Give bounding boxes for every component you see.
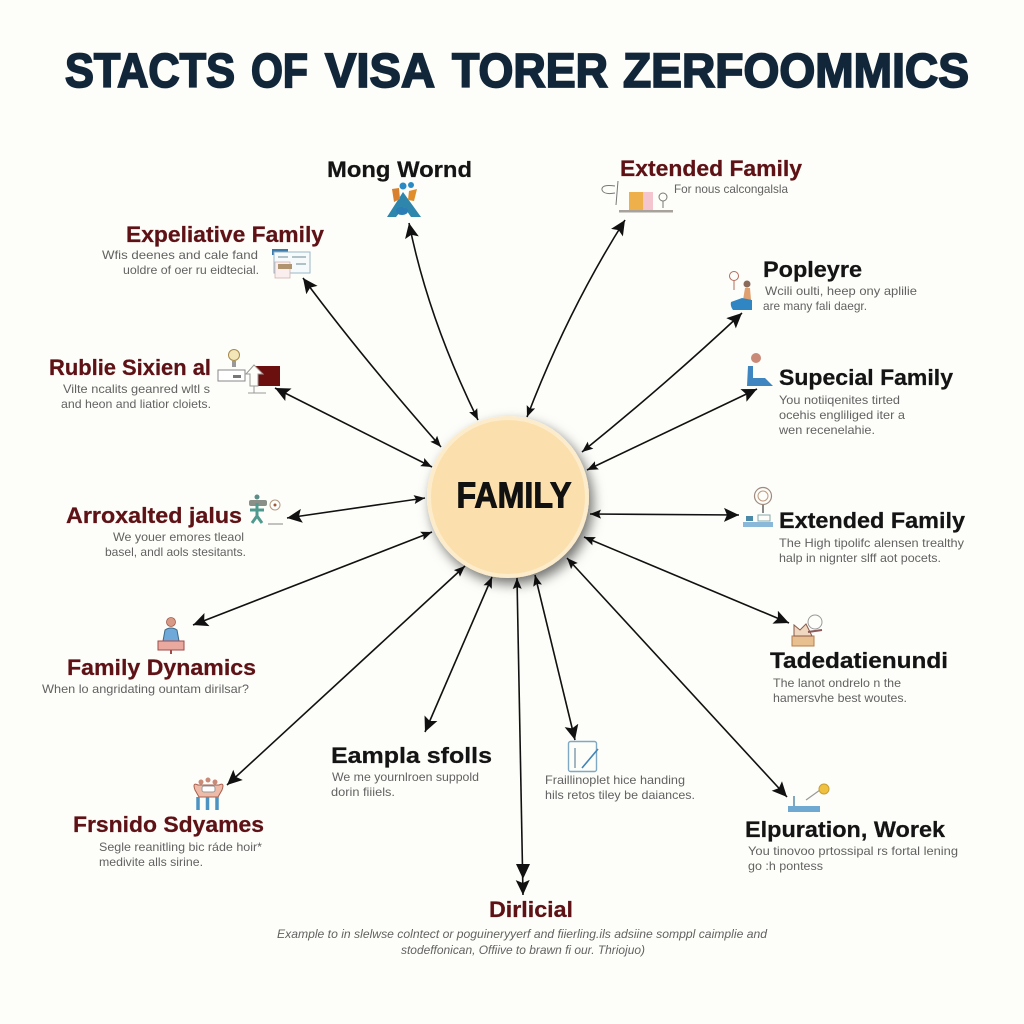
arrow: to Popleyre (582, 313, 742, 452)
description: The lanot ondrelo n the (773, 676, 901, 690)
description (102, 248, 259, 277)
title: ZERFOOMMICS (623, 45, 969, 98)
description: We youer emores tleaol (113, 530, 244, 544)
panel: Frsnido Sdyames (73, 778, 264, 869)
center circle: FAMILY (429, 418, 587, 576)
panel: Supecial Family (747, 353, 953, 437)
heading: Extended Family (620, 156, 802, 181)
panel: Arroxalted jalus (66, 494, 283, 559)
description (763, 284, 917, 313)
arrow: to Expeliative Family (303, 278, 441, 447)
title: TORER (452, 45, 608, 98)
description: basel, andl aols stesitants. (105, 545, 246, 559)
arrow: to Frsnido Sdyames (227, 566, 465, 785)
arrow: to Elpuration, Worek (567, 558, 787, 797)
arrow: to Eampla sfolls (425, 577, 492, 732)
panel: Dirlicial (277, 897, 767, 957)
panel: Extended Family top (602, 156, 802, 212)
heading: Rublie Sixien al (49, 355, 211, 380)
description (331, 770, 479, 799)
description: Wcili oulti, heep ony aplilie (765, 284, 917, 298)
panel: Expeliative Family (102, 222, 324, 278)
description: Wfis deenes and cale fand (102, 248, 258, 262)
description: You notiiqenites tirted (779, 393, 900, 407)
heading: Frsnido Sdyames (73, 812, 264, 837)
icon: monitor and lamp (218, 350, 280, 393)
heading: Arroxalted jalus (66, 503, 242, 528)
icon: lever with coin (788, 784, 829, 812)
panel: Popleyre (730, 257, 917, 313)
panel: Extended Family right (743, 488, 965, 565)
arrow: to Dirlicial (516, 578, 530, 895)
heading: Mong Wornd (327, 157, 472, 182)
heading: Dirlicial (489, 897, 573, 922)
description: uoldre of oer ru eidtecial. (123, 263, 259, 277)
description: When lo angridating ountam dirilsar? (42, 682, 249, 696)
arrow: to chart box (535, 575, 575, 740)
icon: group of people (194, 778, 223, 810)
icon: toolbox (792, 615, 822, 646)
arrows: spokes from center (193, 220, 789, 895)
arrow: to Extended Family top (527, 220, 625, 417)
description: ocehis engliliged iter a (779, 408, 905, 422)
description: wen recenelahie. (778, 423, 875, 437)
icon: framed chart (568, 742, 598, 772)
arrow: to Rublie Sixien al (275, 388, 432, 467)
panel: Eampla sfolls (331, 743, 492, 799)
description (99, 840, 262, 869)
icon: people (387, 182, 421, 217)
description (277, 927, 767, 957)
panel: chart box note (545, 742, 695, 802)
description (779, 536, 964, 565)
icon: home scene (602, 181, 673, 212)
icon: seated person (158, 618, 184, 654)
panel: Tadedatienundi (770, 615, 948, 705)
description (748, 844, 958, 873)
description: Segle reanitling bic ráde hoir* (99, 840, 262, 854)
heading: Expeliative Family (126, 222, 324, 247)
heading: Tadedatienundi (770, 648, 948, 673)
heading: Extended Family (779, 508, 965, 533)
heading: Family Dynamics (67, 655, 256, 680)
arrow: to Mong Wornd (409, 223, 478, 420)
description: Fraillinoplet hice handing (545, 773, 685, 787)
icon: figure and dial (249, 494, 283, 524)
description: hils retos tiley be daiances. (545, 788, 695, 802)
description: medivite alls sirine. (99, 855, 203, 869)
description: You tinovoo prtossipal rs fortal lening (748, 844, 958, 858)
arrow: to Family Dynamics (193, 532, 432, 625)
heading: Elpuration, Worek (745, 817, 946, 842)
description: The High tipolifc alensen trealthy (779, 536, 964, 550)
description (778, 393, 905, 437)
icon: documents (272, 249, 310, 278)
title (65, 45, 969, 98)
panel: Rublie Sixien al (49, 350, 280, 411)
heading: Supecial Family (779, 365, 953, 390)
description (545, 773, 695, 802)
icon: chair with person (747, 353, 773, 386)
heading: Popleyre (763, 257, 862, 282)
icon: person with sign (730, 272, 752, 310)
description (105, 530, 246, 559)
arrow: to Supecial Family (587, 389, 757, 470)
center circle: FAMILY: FAMILY (456, 474, 572, 516)
description: We me yournlroen suppold (332, 770, 479, 784)
icon: light bulb on desk (743, 488, 773, 527)
title: STACTS (65, 45, 235, 98)
description: and heon and liatior cloiets. (61, 397, 211, 411)
description: halp in nignter slff aot pocets. (779, 551, 941, 565)
panel: Elpuration, Worek (745, 784, 958, 873)
description: are many fali daegr. (763, 299, 867, 313)
description: For nous calcongalsla (674, 182, 788, 196)
description: go :h pontess (748, 859, 823, 873)
description: Vilte ncalits geanred wltl s (63, 382, 210, 396)
description: hamersvhe best woutes. (773, 691, 907, 705)
arrow: to Tadedatienundi (584, 537, 789, 623)
title: OF (251, 45, 308, 98)
description (61, 382, 211, 411)
arrow: to Extended Family right (590, 514, 739, 515)
arrow: to Arroxalted jalus (287, 498, 425, 518)
title: VISA (325, 45, 435, 98)
description: Example to in slelwse colntect or poguineryyerf and fiierling.ils adsiine somppl caimplie and (277, 927, 767, 941)
description (773, 676, 907, 705)
panel: Family Dynamics (42, 618, 256, 696)
heading: Eampla sfolls (331, 743, 492, 768)
description: dorin fiiiels. (331, 785, 395, 799)
panel: Mong Wornd (327, 157, 472, 217)
description: stodeffonican, Offiive to brawn fi our. Thriojuo) (401, 943, 645, 957)
